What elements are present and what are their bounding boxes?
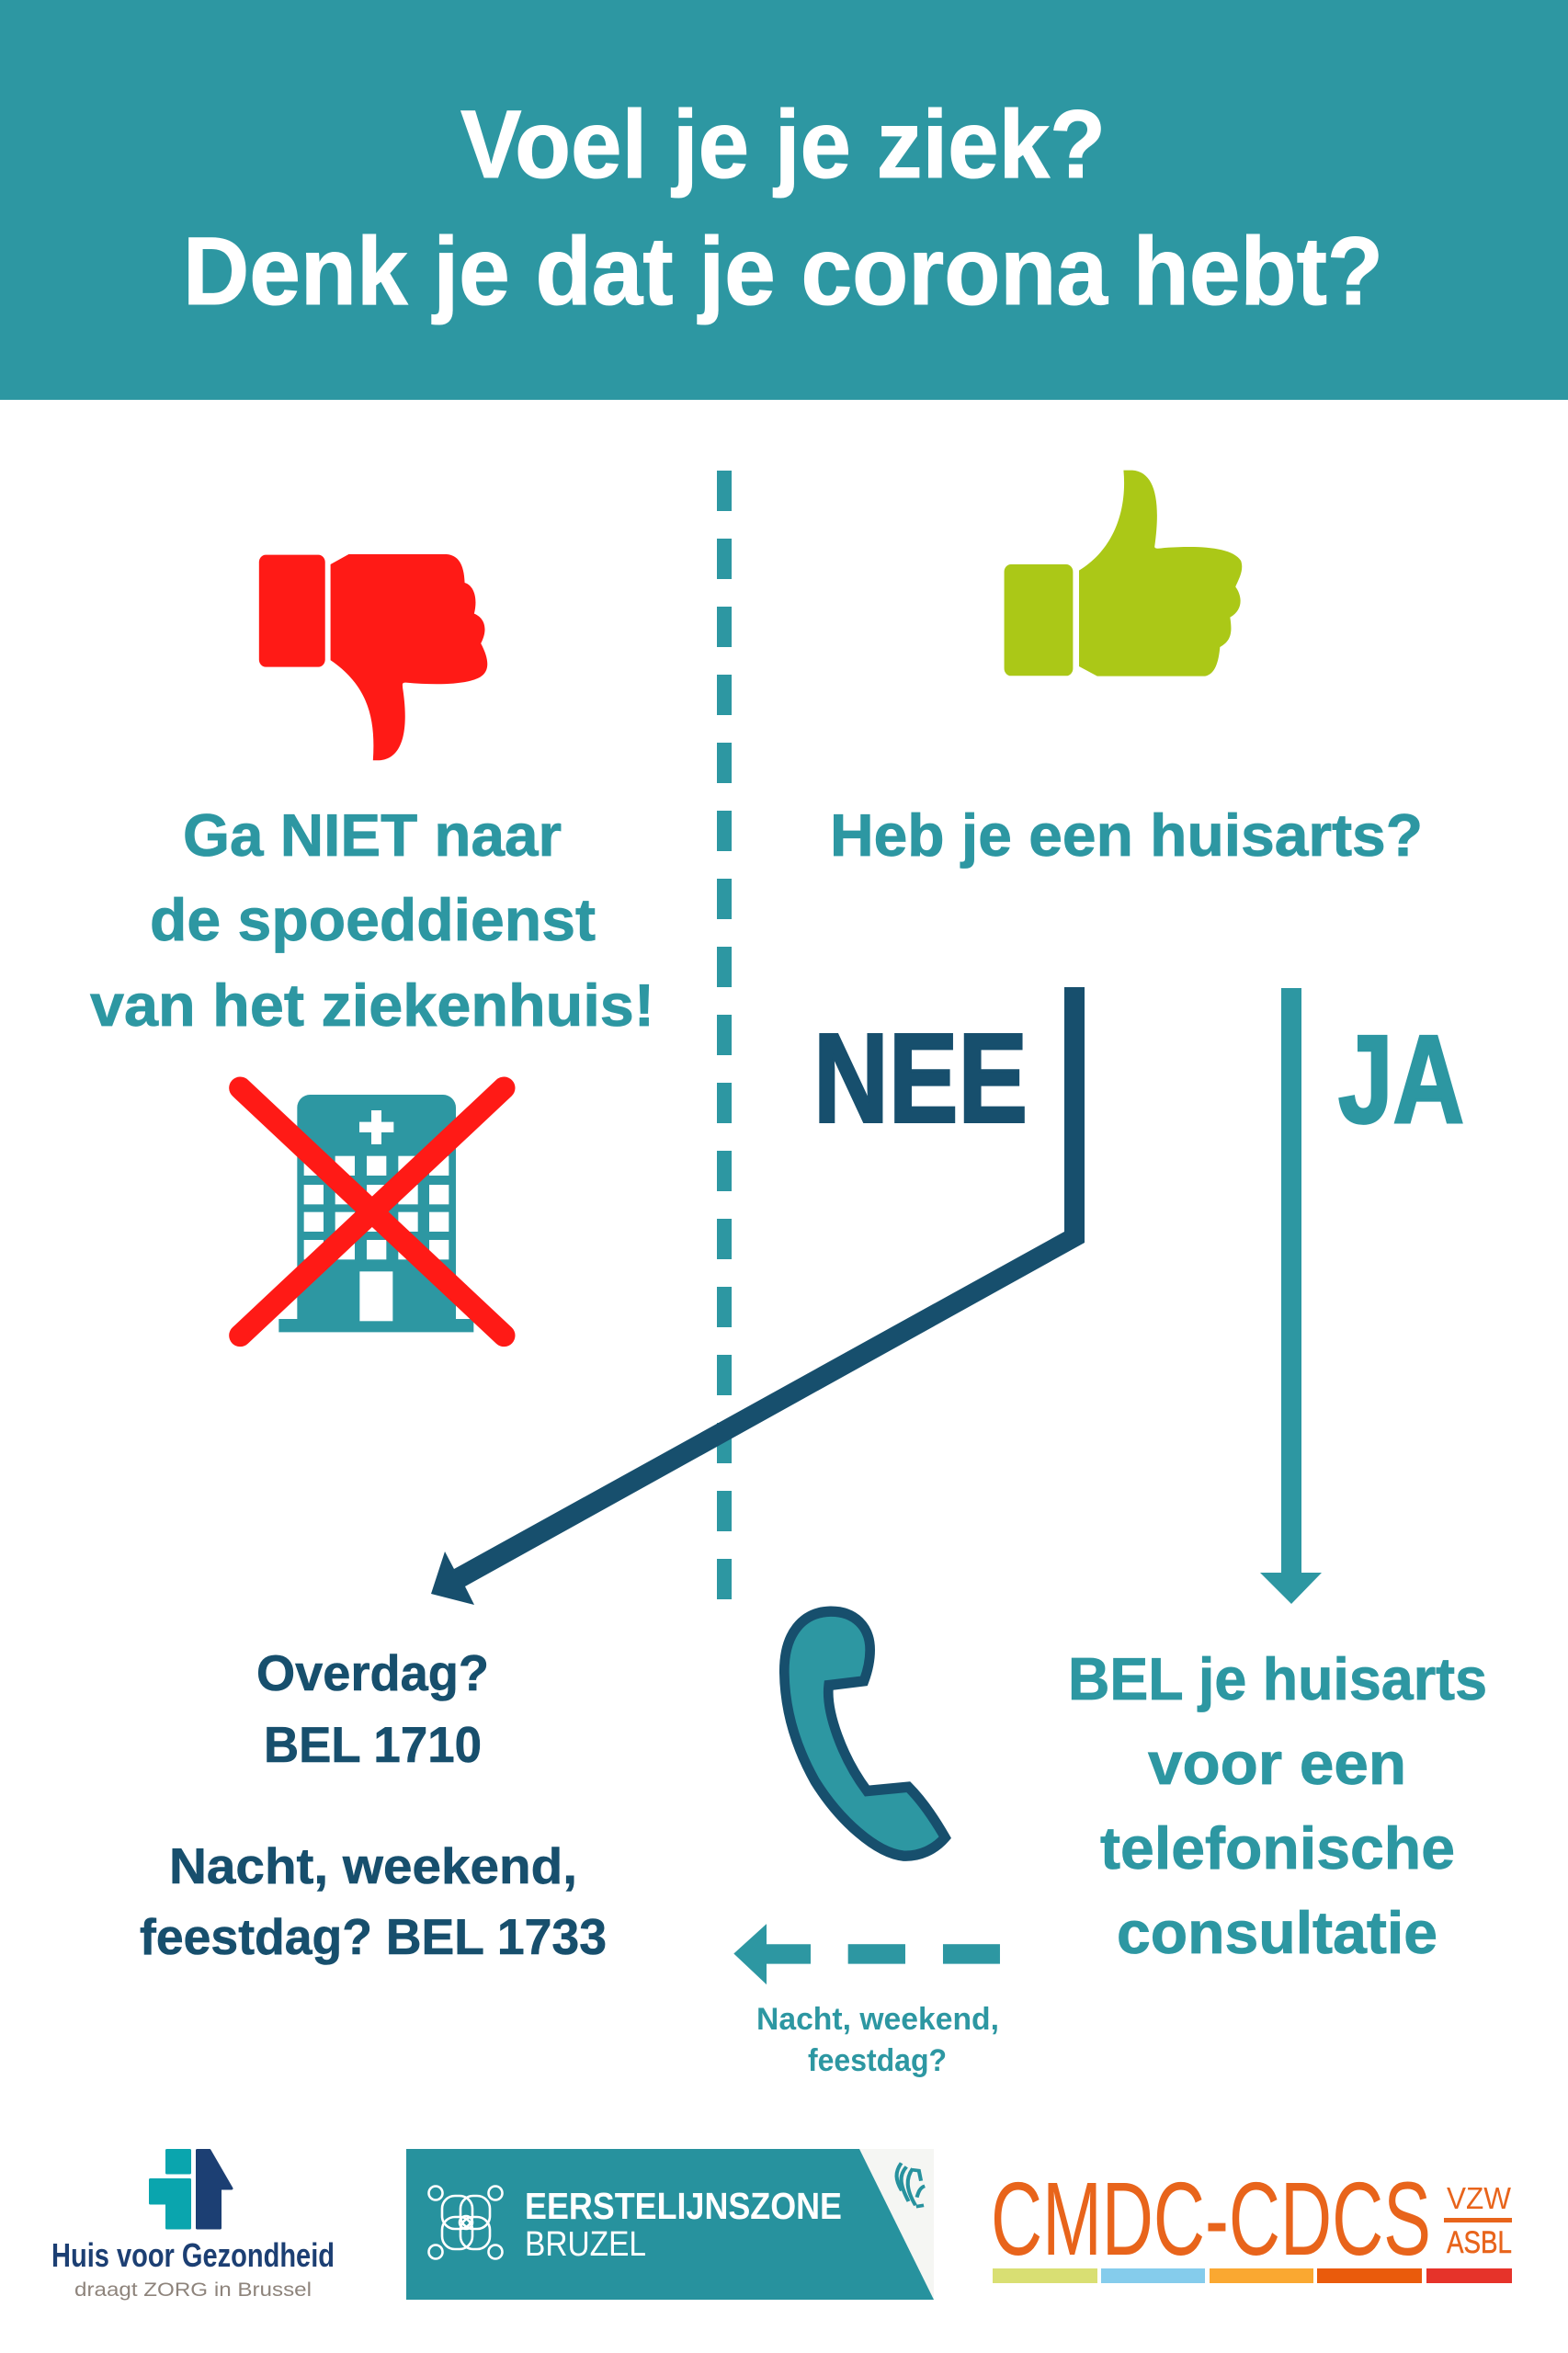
- caption: night, weekend, holiday: feestdag?: [808, 2043, 947, 2078]
- text: phone numbers: Nacht, weekend,: [169, 1837, 577, 1894]
- text: call your GP: voor een: [1148, 1730, 1406, 1797]
- question: do you have a GP: Heb je een huisarts?: [830, 801, 1423, 869]
- icon: thumbs down: [259, 554, 487, 760]
- warning text: do not go to the emergency room: Ga NIET naar: [183, 801, 562, 869]
- logo: Eerstelijnszone Bruzel: EERSTELIJNSZONE: [525, 2185, 842, 2227]
- text: phone numbers: [140, 1644, 607, 1965]
- text: phone numbers: Overdag?: [256, 1644, 489, 1701]
- text: call your GP: consultatie: [1117, 1899, 1437, 1966]
- logo: CMDC-CDCS: VZW: [1447, 2181, 1512, 2215]
- dashed arrow: to the left: [733, 1924, 1000, 1984]
- arrow: JA downwards: [1260, 988, 1322, 1604]
- logo: Eerstelijnszone Bruzel: [406, 2149, 934, 2300]
- title: Denk je dat je corona hebt?: [183, 218, 1383, 325]
- label: NEE: NEE: [813, 1007, 1028, 1149]
- text: call your GP: telefonische: [1100, 1814, 1455, 1881]
- caption: night, weekend, holiday: Nacht, weekend,: [756, 2002, 999, 2037]
- icon: telephone: [784, 1611, 945, 1856]
- warning text: do not go to the emergency room: [90, 801, 654, 1039]
- logo: Huis voor Gezondheid: Huis voor Gezondheid: [51, 2236, 335, 2274]
- label: JA: JA: [1338, 1009, 1464, 1149]
- logo: Huis voor Gezondheid: [51, 2151, 335, 2301]
- warning text: do not go to the emergency room: de spoeddienst: [150, 886, 596, 953]
- title: Voel je je ziek?: [460, 91, 1106, 199]
- icon: Flemish lion: [897, 2163, 925, 2207]
- text: phone numbers: feestdag? BEL 1733: [140, 1908, 607, 1965]
- caption: night, weekend, holiday: [756, 2002, 999, 2078]
- logo: Eerstelijnszone Bruzel: BRUZEL: [525, 2225, 646, 2264]
- title: [183, 91, 1383, 325]
- arrow: NEE to the left: [431, 987, 1085, 1605]
- icon: crossed-out hospital: [240, 1088, 504, 1336]
- text: phone numbers: BEL 1710: [264, 1716, 482, 1773]
- text: call your GP: [1068, 1645, 1487, 1966]
- header panel: [0, 0, 1568, 400]
- icon: network circles: [428, 2186, 502, 2259]
- logo: CMDC-CDCS: ASBL: [1447, 2225, 1512, 2260]
- warning text: do not go to the emergency room: van het ziekenhuis!: [90, 972, 654, 1039]
- dashed divider: [717, 471, 732, 1599]
- icon: thumbs up: [1005, 471, 1242, 676]
- logo: Huis voor Gezondheid: draagt ZORG in Brussel: [74, 2279, 312, 2301]
- text: call your GP: BEL je huisarts: [1068, 1645, 1487, 1712]
